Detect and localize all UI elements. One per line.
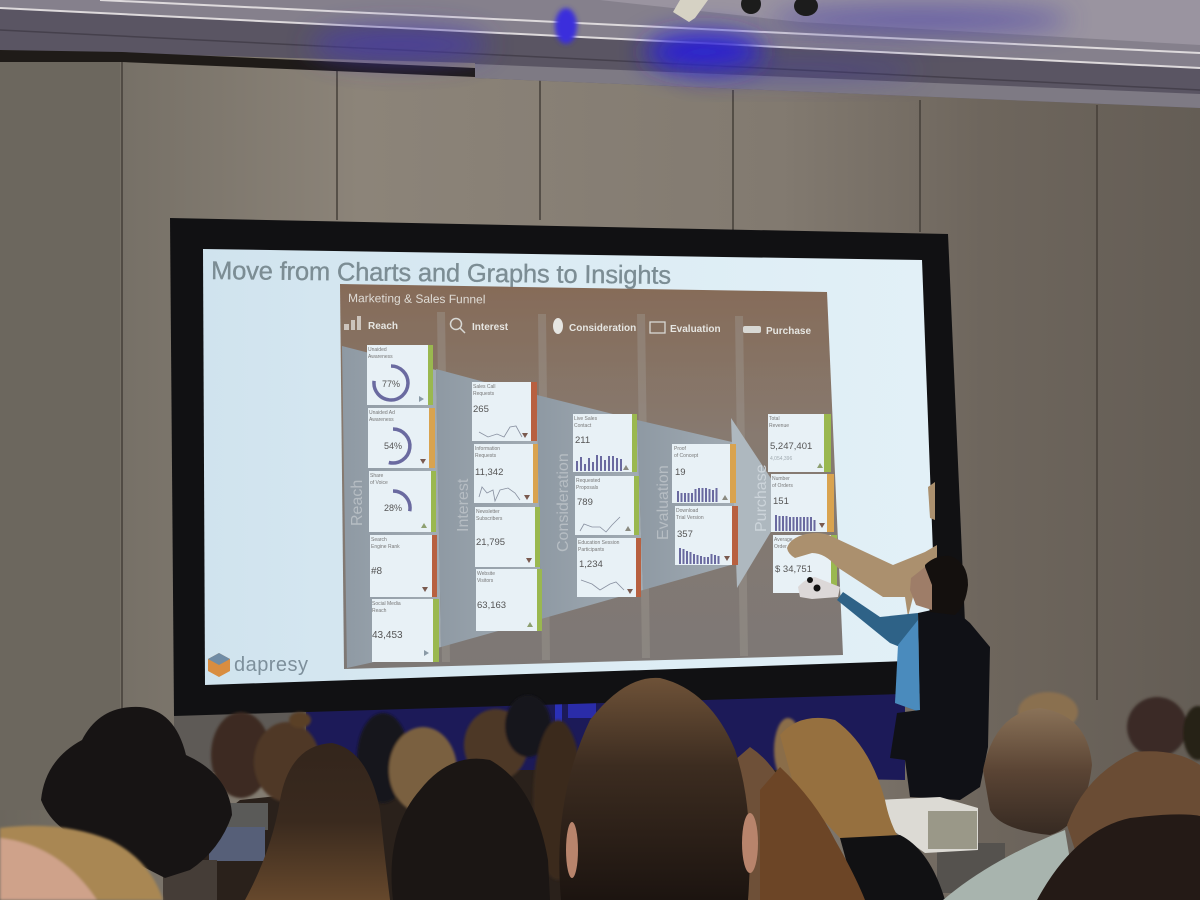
KPI card: number of orders: Number [772,476,790,482]
column headers with icons: Evaluation [670,324,721,335]
KPI card: sales call requests [472,382,537,441]
ceiling spotlights [673,0,818,22]
KPI card: share of voice [369,471,436,532]
projection screen frame [170,218,968,716]
KPI card: sales call requests: 265 [473,404,489,415]
KPI card: requested proposals [575,476,639,535]
bald man with glasses [983,708,1092,835]
KPI card: number of orders [771,474,834,532]
vertical stage labels: Purchase [753,464,770,532]
KPI card: proof of concept: of Concept [674,453,699,459]
column headers with icons: Consideration [569,323,636,334]
KPI card: social media reach [372,599,439,662]
audience [0,678,1200,900]
KPI card: website visitors [476,569,542,631]
column headers with icons: Purchase [766,326,811,337]
KPI card: search engine rank: Engine Rank [371,544,400,550]
KPI card: sales call requests: Sales Call [473,384,496,390]
KPI card: total revenue: Revenue [769,423,789,429]
KPI card: live sales contact: Live Sales [574,416,598,422]
projector on table [877,797,1005,893]
audience member with long hair, right of large head [735,747,800,900]
logo: dapresy [208,653,308,677]
KPI card: information requests: 11,342 [475,467,503,478]
KPI card: share of voice: 28% [384,503,402,513]
KPI card: social media reach: Reach [372,608,387,614]
presenter hair and face [925,556,968,615]
KPI card: unaided ad awareness: Awareness [369,417,394,423]
KPI card: total revenue: 5,247,401 [770,441,812,452]
KPI card: newsletter subscribers: Newsletter [476,509,500,515]
dark stage drape below screen [174,690,905,780]
KPI card: website visitors: Website [477,571,495,577]
KPI card: unaided ad awareness [368,408,435,468]
logo: dapresy: dapresy [234,654,308,676]
KPI card: unaided ad awareness: Unaided Ad [369,410,395,416]
vertical stage labels: Interest [455,478,472,532]
gray patterned top [219,803,268,830]
KPI card: average order: $ 34,751 [775,564,812,575]
column headers with icons: Reach [368,321,398,332]
KPI card: download trial version: Download [676,508,698,514]
KPI card: search engine rank [370,535,437,597]
KPI card: download trial version: 357 [677,529,693,540]
woman with long brown hair [245,743,390,900]
KPI card: live sales contact: 211 [575,435,590,446]
KPI card: requested proposals: 789 [577,497,593,508]
projected slide [203,249,937,685]
audience member with short brown hair [559,678,750,900]
audience member with curly auburn hair [760,767,865,900]
KPI card: live sales contact [573,414,637,472]
KPI card: share of voice: Share [370,473,384,479]
KPI card: website visitors: Visitors [477,578,494,584]
presenter jacket and trousers [890,606,990,800]
KPI card: information requests: Information [475,446,500,452]
KPI card: number of orders: of Orders [772,483,793,489]
KPI card: website visitors: 63,163 [477,600,506,611]
KPI card: information requests: Requests [475,453,497,459]
KPI card: average order [773,535,837,593]
KPI card: education session participants [577,538,641,597]
funnel stages [342,346,772,668]
KPI card: newsletter subscribers [475,507,540,567]
KPI card: proof of concept: Proof [674,446,687,452]
KPI card: information requests [474,444,538,503]
KPI card: social media reach: 43,453 [372,630,403,641]
KPI card: search engine rank: Search [371,537,387,543]
ceiling molding with blue light [0,0,1200,108]
presenter blue shirt and sleeve [837,592,920,712]
KPI card: newsletter subscribers: 21,795 [476,537,505,548]
seated person with light sweater [209,827,265,861]
slide contents [208,257,843,677]
leopard print top [163,860,217,900]
KPI card: unaided awareness: Unaided [368,347,387,353]
presenter [798,556,990,800]
KPI card: education session participants: 1,234 [579,559,603,570]
KPI card: total revenue [768,414,831,472]
presenter shadow: arm and hand [787,482,937,617]
column headers with icons [344,316,811,337]
audience member with dark straight hair [392,759,550,900]
KPI card: sales call requests: Requests [473,391,495,397]
KPI card: unaided awareness: 77% [382,379,400,389]
vertical stage labels: Evaluation [655,465,672,540]
audience member with tied-up hair, right [1067,751,1200,850]
KPI card: number of orders: 151 [773,496,789,507]
KPI card: unaided ad awareness: 54% [384,441,402,451]
KPI card: average order: Average [774,537,793,543]
KPI card: proof of concept: 19 [675,467,686,478]
slide title: Move from Charts and Graphs to Insights [211,257,671,290]
KPI card: download trial version [675,506,738,565]
KPI card: download trial version: Trial Version [676,515,704,521]
vertical stage labels [349,453,770,552]
panel: marketing and sales funnel [340,284,843,669]
KPI card: requested proposals: Proposals [576,485,599,491]
KPI card: social media reach: Social Media [372,601,401,607]
back row heads [211,692,1200,880]
audience member with dark curly hair [41,707,232,878]
audience member with long light-brown hair [780,718,900,840]
KPI card: unaided awareness: Awareness [368,354,393,360]
KPI card: average order: Order [774,544,787,550]
KPI card: total revenue: Total [769,416,780,422]
KPI card: education session participants: Participants [578,547,605,553]
presenter hand with clicker [798,577,840,599]
dark seating area between heads [165,770,830,900]
bald and blond audience member, bottom left [0,826,163,900]
column headers with icons: Interest [472,322,509,333]
vertical stage labels: Reach [349,480,366,526]
KPI card: unaided awareness [367,345,433,405]
KPI card: live sales contact: Contact [574,423,592,429]
KPI card: newsletter subscribers: Subscribers [476,516,503,522]
KPI card: total revenue: 4,054,396 [770,456,792,462]
KPI card: search engine rank: #8 [371,566,383,577]
vertical stage labels: Consideration [555,453,572,552]
KPI card: education session participants: Education Session [578,540,620,546]
KPI card: share of voice: of Voice [370,480,388,486]
panel heading: Marketing & Sales Funnel [348,291,486,306]
audience member with dark hair, bottom right [1037,814,1200,900]
KPI card: proof of concept [672,444,736,503]
KPI card: requested proposals: Requested [576,478,600,484]
